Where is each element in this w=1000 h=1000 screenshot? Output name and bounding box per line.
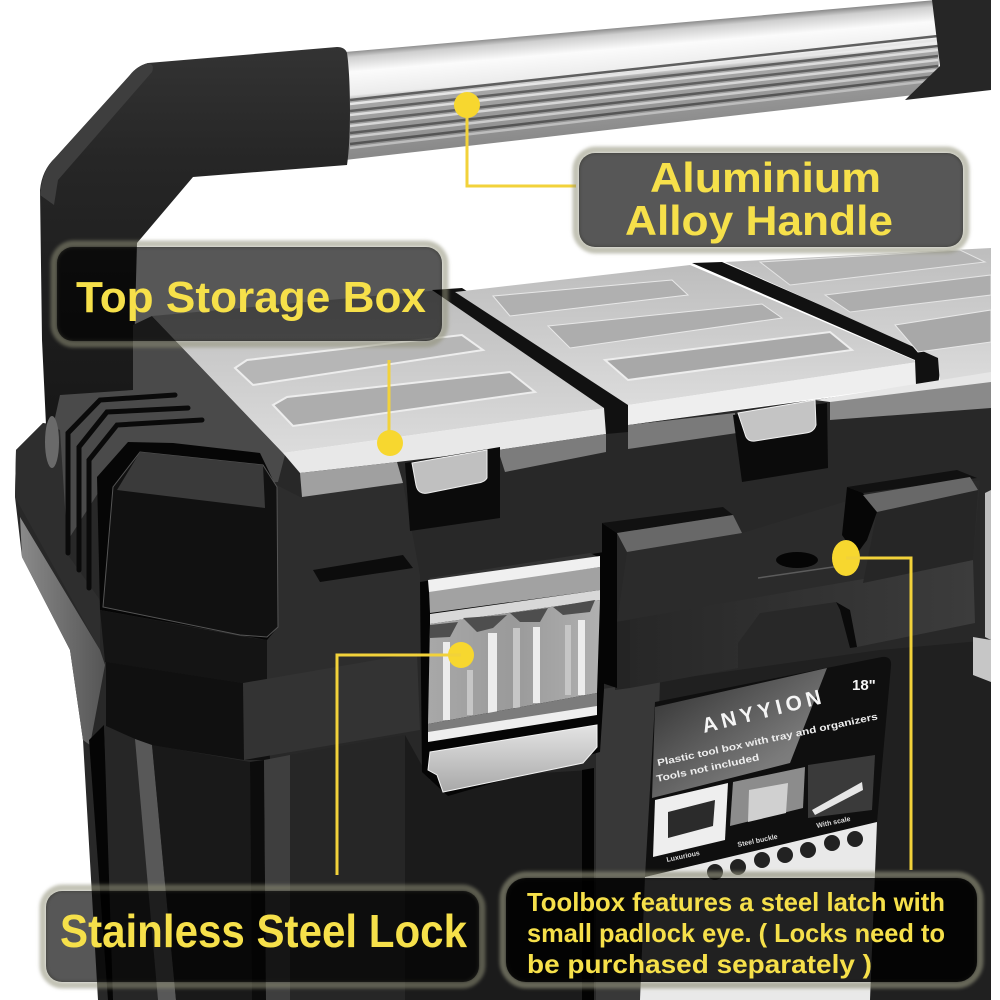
vent ribs	[68, 395, 202, 588]
label light streak	[652, 668, 827, 798]
bumper top face	[117, 452, 265, 508]
white right margin	[991, 0, 1000, 1000]
lower body columns	[89, 725, 594, 1000]
corner lower side face	[15, 423, 100, 650]
handle: aluminium bar	[345, 0, 940, 160]
skirt right	[830, 378, 991, 420]
lid middle recess panels	[493, 280, 688, 316]
label text: Tools not included	[655, 752, 761, 785]
lock top shadow	[428, 553, 600, 582]
lock frame	[420, 552, 604, 796]
stainless steel lock	[420, 490, 991, 796]
label box	[576, 150, 966, 250]
padlock eye	[776, 552, 818, 568]
brand: ANYYION	[700, 686, 824, 738]
lower corner block	[100, 610, 267, 690]
bolt	[45, 416, 59, 468]
marker dot	[454, 92, 480, 118]
lid left recess panels	[235, 335, 483, 385]
right lock	[985, 490, 991, 640]
storage lid	[152, 248, 991, 531]
hasp right side	[842, 487, 877, 555]
label box	[503, 875, 980, 985]
notch	[836, 602, 857, 648]
label text: small padlock eye. ( Locks need to	[527, 918, 945, 948]
skirt middle	[628, 413, 737, 449]
handle	[40, 0, 991, 425]
label text: Top Storage Box	[76, 273, 427, 322]
label photos	[653, 755, 875, 857]
lower lighter block	[243, 653, 420, 760]
lock rail	[430, 590, 600, 624]
label text: Toolbox features a steel latch with	[527, 887, 945, 917]
lock fluted plate	[428, 600, 600, 724]
lid middle section	[455, 265, 918, 405]
hasp left edge	[602, 523, 617, 688]
label text: Plastic tool box with tray and organizers	[656, 711, 879, 769]
body main	[15, 376, 991, 1000]
slot	[313, 555, 413, 582]
leader line	[388, 360, 390, 442]
lid left section	[152, 290, 606, 453]
hasp left strip	[617, 515, 742, 552]
label white strip	[640, 822, 877, 1000]
corner wedge	[50, 316, 285, 540]
corner surround	[97, 442, 278, 640]
callout: top storage box	[54, 244, 445, 456]
leader line	[467, 105, 576, 186]
marker dot	[448, 642, 474, 668]
lower front panel	[615, 560, 975, 688]
toolbox body	[15, 316, 991, 1000]
label box	[43, 888, 482, 985]
lid right recess panels	[760, 250, 985, 285]
skirt centre	[498, 434, 606, 472]
marker dot	[832, 540, 860, 576]
lower dark block	[106, 662, 270, 760]
photo captions: With scale	[816, 816, 851, 830]
callout: steel latch note	[503, 540, 980, 985]
lid left front edge	[283, 408, 606, 473]
corner bumper	[103, 452, 278, 637]
photo captions: Steel buckle	[737, 834, 778, 849]
latch hasp	[602, 470, 980, 690]
label text: be purchased separately )	[527, 949, 872, 979]
handle: right grip	[905, 0, 991, 100]
flute scallops	[430, 600, 595, 638]
marker dot	[377, 430, 403, 456]
handle: grip highlight facet	[40, 63, 153, 205]
handle: left black grip	[40, 47, 350, 425]
label black card	[645, 657, 891, 877]
lock top plate	[429, 567, 600, 613]
lid right section	[725, 248, 991, 384]
label text: Aluminium	[650, 154, 881, 201]
size: 18"	[852, 677, 876, 694]
hasp right top	[847, 470, 977, 493]
divider strap	[432, 288, 628, 434]
hasp left top	[602, 507, 733, 533]
callout: stainless steel lock	[43, 642, 482, 985]
right lower body	[596, 640, 991, 1000]
flute highlights	[443, 620, 585, 720]
lock bottom plate	[428, 725, 597, 792]
right upper body	[267, 480, 420, 690]
skirt left	[300, 462, 403, 497]
second strap	[692, 262, 942, 385]
photo captions	[666, 816, 851, 864]
product label	[640, 657, 891, 1000]
hasp right front	[863, 490, 978, 583]
label text: Alloy Handle	[625, 197, 893, 244]
leader line	[846, 558, 911, 870]
photo captions: Luxurious	[666, 850, 701, 864]
label icons	[707, 831, 863, 880]
label text: Stainless Steel Lock	[60, 905, 467, 957]
grey side band	[20, 517, 105, 745]
label text	[625, 154, 893, 244]
clip middle	[733, 403, 828, 482]
body front panel	[617, 480, 980, 622]
lock lower rail	[428, 693, 597, 735]
label box	[54, 244, 445, 344]
label text	[527, 887, 945, 979]
callout: aluminium alloy handle	[454, 92, 966, 250]
hasp right strip	[863, 477, 978, 512]
leader line	[337, 655, 461, 875]
label text	[655, 711, 879, 785]
clip left	[405, 447, 500, 531]
